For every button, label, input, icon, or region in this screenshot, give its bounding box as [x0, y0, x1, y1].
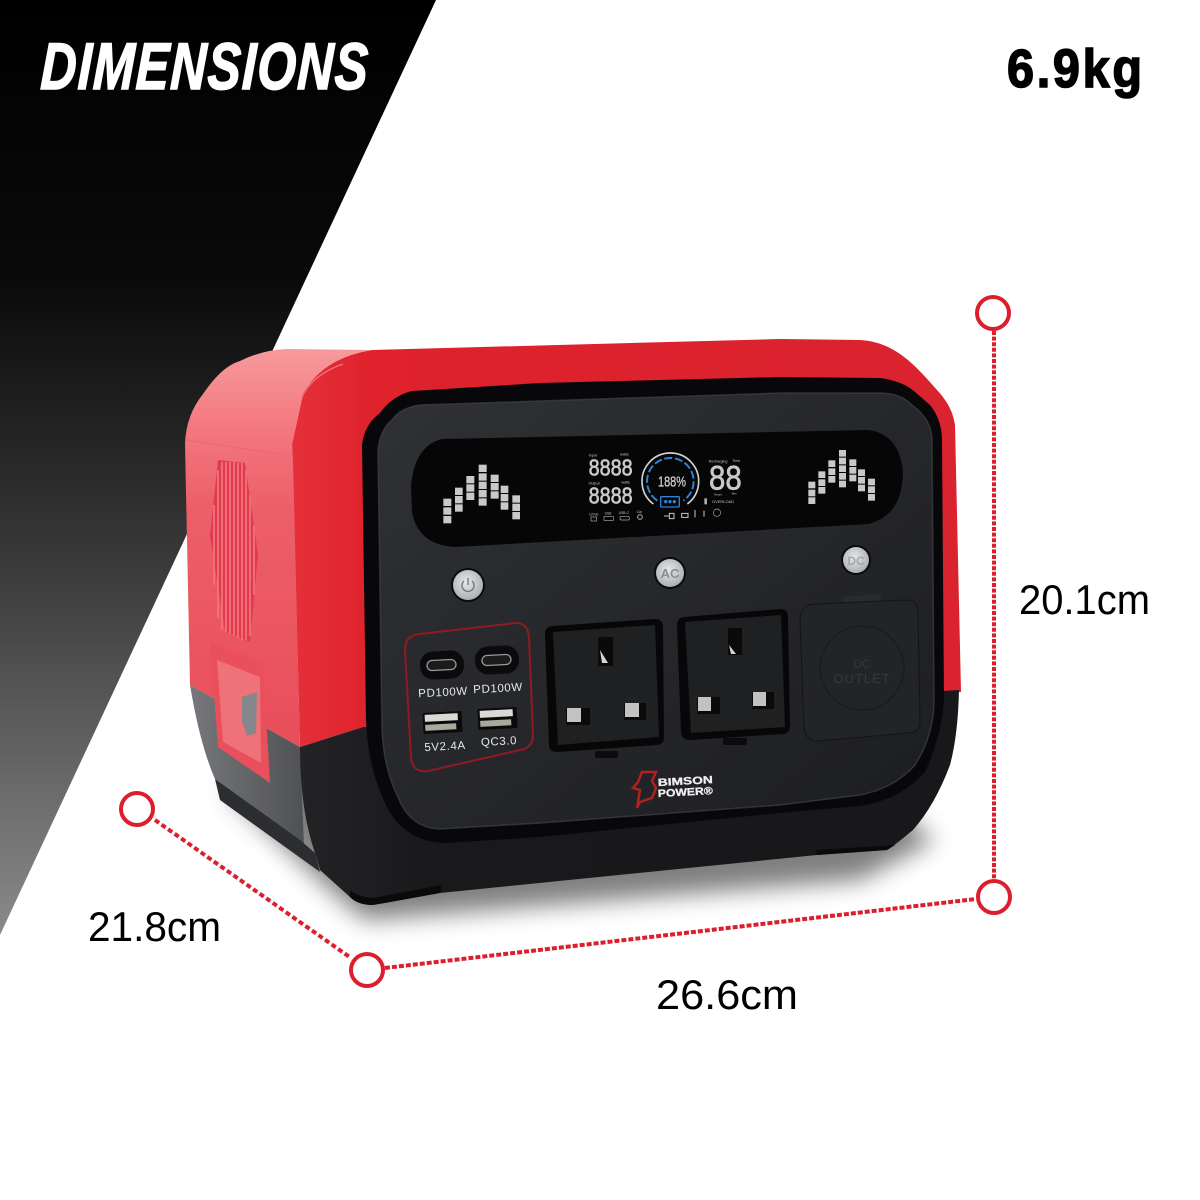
recharging time: OVERLOAD	[712, 499, 734, 504]
recharging time	[664, 459, 742, 519]
input/output readouts: Output	[589, 481, 600, 485]
black panel frame	[362, 377, 944, 843]
side door	[210, 642, 270, 783]
title: DIMENSIONS	[39, 30, 371, 104]
recharging time: Time	[732, 459, 740, 463]
height dimension line	[977, 297, 1010, 913]
label QC3.0: QC3.0	[481, 735, 517, 749]
black gradient corner background	[0, 0, 436, 935]
red front shell	[292, 339, 961, 747]
input/output readouts: USB	[605, 512, 612, 516]
side vent	[210, 460, 258, 642]
right level bars	[808, 450, 875, 504]
battery gauge	[642, 453, 699, 507]
recharging time: Recharging	[709, 460, 727, 464]
ground shadow	[225, 760, 935, 920]
input/output readouts: watts	[620, 453, 629, 457]
light red side shell	[185, 349, 372, 747]
width dimension line	[385, 899, 976, 968]
depth label: 21.8cm	[88, 903, 221, 950]
depth dimension line	[121, 793, 383, 986]
height label: 20.1cm	[1019, 576, 1150, 623]
width label: 26.6cm	[656, 971, 798, 1018]
left level bars	[443, 465, 520, 523]
display contents in zoom coordinates	[443, 450, 875, 523]
UK socket 1	[545, 619, 664, 758]
USB-C port 2	[474, 645, 520, 675]
brand logo: POWER®	[658, 785, 713, 800]
label PD100W: PD100W	[473, 682, 523, 696]
UK socket 2	[677, 609, 790, 745]
DC outlet cover	[800, 594, 920, 741]
brand logo: BIMSON	[658, 774, 713, 789]
battery gauge: 188%	[658, 475, 686, 491]
USB-C port 1	[419, 650, 465, 680]
door plug icon	[242, 692, 257, 736]
recharging time: 88	[709, 460, 742, 498]
USB-A port 2	[478, 707, 518, 730]
top handle recess	[302, 364, 343, 397]
input/output readouts: Input	[589, 454, 597, 458]
brand logo	[633, 772, 713, 808]
input/output readouts: 12Vdc	[589, 512, 599, 516]
recharging time: Hours	[714, 493, 722, 497]
red outline of port group	[405, 623, 533, 771]
product: portable power station	[185, 339, 961, 920]
control panel	[378, 393, 934, 829]
recharging time: Min	[732, 492, 737, 496]
input/output readouts: USB-C	[619, 511, 630, 515]
input/output readouts: watts	[621, 480, 630, 484]
input/output readouts: 8888	[589, 483, 633, 509]
AC button: AC	[661, 566, 680, 581]
weight label: 6.9kg	[1007, 38, 1145, 99]
USB port group	[405, 623, 533, 771]
DC outlet cover: DC	[853, 657, 871, 671]
input/output readouts: 8888	[589, 455, 633, 481]
USB-A port 1	[423, 711, 463, 734]
side edge between top and side	[186, 440, 292, 456]
side door inner label	[217, 660, 261, 763]
feet	[350, 845, 895, 905]
label PD100W: PD100W	[418, 686, 468, 700]
AC button	[654, 557, 686, 589]
input/output readouts	[589, 453, 643, 521]
DC outlet cover: OUTLET	[833, 671, 891, 686]
LCD display	[411, 430, 903, 547]
input/output readouts: Car	[637, 510, 643, 514]
black lower front	[300, 690, 959, 905]
DC button	[841, 545, 871, 575]
label 5V2.4A: 5V2.4A	[424, 740, 466, 754]
DC button: DC	[847, 554, 865, 568]
grey lower side	[190, 685, 304, 845]
dark base band on side	[215, 779, 320, 872]
power button	[451, 568, 485, 602]
